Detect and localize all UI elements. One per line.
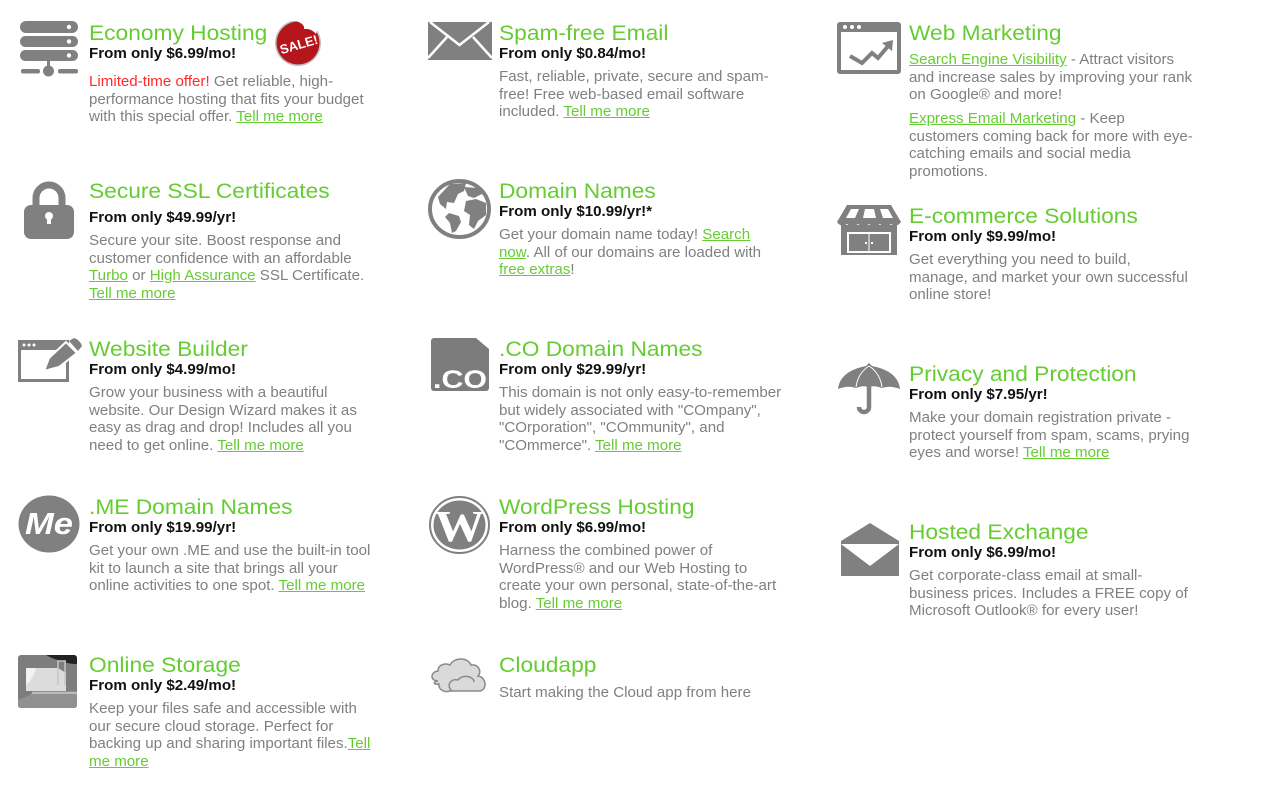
heading: Hosted Exchange [909, 520, 1089, 544]
panel: E-commerce Solutions [837, 204, 1188, 303]
description: free extras! [499, 262, 575, 278]
description: manage, and market your own successful [909, 270, 1188, 286]
description [499, 69, 769, 120]
description: our secure cloud storage. Perfect for [89, 719, 333, 735]
description [499, 543, 776, 612]
description: Get your domain name today! Search [499, 227, 750, 243]
description: Grow your business with a beautiful [89, 385, 328, 401]
description: me more [89, 754, 149, 770]
icon: padlock [24, 182, 74, 239]
description: need to get online. Tell me more [89, 438, 304, 454]
panel: Economy Hosting [20, 21, 364, 125]
icon: Me circle [18, 496, 80, 552]
price: From only $6.99/mo! [909, 545, 1056, 561]
price: From only $29.99/yr! [499, 362, 646, 378]
heading: Web Marketing [909, 21, 1062, 45]
heading: Online Storage [89, 653, 241, 677]
description: Keep your files safe and accessible with [89, 701, 357, 717]
heading: Cloudapp [499, 653, 596, 677]
sale badge [275, 21, 321, 66]
description: Get your own .ME and use the built-in tool [89, 543, 370, 559]
heading: .CO Domain Names [499, 337, 703, 361]
icon: WordPress logo [429, 496, 490, 554]
description: with this special offer. Tell me more [89, 109, 323, 125]
price: From only $9.99/mo! [909, 229, 1056, 245]
icon: window with pencil [18, 338, 82, 382]
heading: Spam-free Email [499, 21, 668, 45]
price: From only $6.99/mo! [499, 520, 646, 536]
description: search engine visibility: on Google® and more! [909, 87, 1062, 103]
icon: globe [428, 179, 491, 239]
description: search engine visibility: and increase sales by improving your rank [909, 70, 1192, 86]
heading: Economy Hosting [89, 21, 267, 45]
icon: clouds [431, 658, 486, 692]
description: online store! [909, 287, 991, 303]
description: "COrporation", "COmmunity", and [499, 420, 725, 436]
description: Tell me more [89, 286, 175, 302]
description: website. Our Design Wizard makes it as [89, 403, 357, 419]
icon: Me circle: Me [25, 506, 73, 541]
price: From only $0.84/mo! [499, 46, 646, 62]
heading: Website Builder [89, 337, 248, 361]
description: Start making the Cloud app from here [499, 685, 751, 701]
description: easy as drag and drop! Includes all you [89, 420, 352, 436]
heading: .ME Domain Names [89, 495, 293, 519]
price: From only $2.49/mo! [89, 678, 236, 694]
description: Make your domain registration private - [909, 410, 1171, 426]
icon: browser with chart [837, 22, 901, 74]
panel: Privacy and Protection [838, 362, 1189, 461]
description: included. Tell me more [499, 104, 650, 120]
description [499, 385, 781, 454]
description: eyes and worse! Tell me more [909, 445, 1109, 461]
description: express email marketing [909, 111, 1193, 180]
panel: Web Marketing [837, 21, 1193, 180]
sale badge: SALE! [278, 32, 320, 57]
description: Get everything you need to build, [909, 252, 1131, 268]
panel: Website Builder [18, 337, 357, 454]
description: express email marketing: catching emails and social media [909, 146, 1131, 162]
description: express email marketing: Express Email Marketing - Keep [909, 111, 1125, 127]
description: Turbo or High Assurance SSL Certificate. [89, 268, 364, 284]
description: Fast, reliable, private, secure and spam- [499, 69, 769, 85]
icon: umbrella [838, 363, 900, 414]
description: performance hosting that fits your budget [89, 92, 364, 108]
description: Limited-time offer! Get reliable, high- [89, 74, 333, 90]
description: Secure your site. Boost response and [89, 233, 341, 249]
description: online activities to one spot. Tell me more [89, 578, 365, 594]
description: WordPress® and our Web Hosting to [499, 561, 747, 577]
heading: Domain Names [499, 179, 656, 203]
description: Harness the combined power of [499, 543, 712, 559]
description [89, 385, 357, 454]
description: express email marketing: customers coming back for more with eye- [909, 129, 1193, 145]
price: From only $4.99/mo! [89, 362, 236, 378]
heading: Privacy and Protection [909, 362, 1137, 386]
panel: Secure SSL Certificates [24, 179, 364, 302]
panel: Spam-free Email [428, 21, 769, 120]
description: business prices. Includes a FREE copy of [909, 586, 1188, 602]
description: but widely associated with "COmpany", [499, 403, 761, 419]
description [909, 568, 1188, 621]
description: This domain is not only easy-to-remember [499, 385, 781, 401]
description [89, 74, 364, 125]
panel: WordPress Hosting [429, 495, 776, 612]
description [89, 233, 364, 302]
description: Microsoft Outlook® for every user! [909, 603, 1138, 619]
price: From only $19.99/yr! [89, 520, 236, 536]
icon: .CO file [431, 338, 489, 391]
description [89, 543, 370, 594]
description: backing up and sharing important files.Tell [89, 736, 370, 752]
price: From only $49.99/yr! [89, 210, 236, 226]
description: "COmmerce". Tell me more [499, 438, 682, 454]
panel: Cloudapp [431, 653, 751, 701]
description: kit to launch a site that brings all your [89, 561, 338, 577]
description: blog. Tell me more [499, 596, 622, 612]
description [909, 410, 1189, 461]
price: From only $10.99/yr!* [499, 204, 652, 220]
icon: storefront [837, 205, 901, 255]
description [909, 252, 1188, 303]
panel: .ME Domain Names [18, 495, 370, 594]
price: From only $6.99/mo! [89, 46, 236, 62]
description: create your own personal, state-of-the-art [499, 578, 776, 594]
description: customer confidence with an affordable [89, 251, 352, 267]
heading: Secure SSL Certificates [89, 179, 330, 203]
panel: Online Storage [18, 653, 370, 770]
price: From only $7.95/yr! [909, 387, 1048, 403]
description: free! Free web-based email software [499, 87, 744, 103]
panel: Hosted Exchange [835, 520, 1210, 625]
description: protect yourself from spam, scams, prying [909, 428, 1189, 444]
heading: E-commerce Solutions [909, 204, 1138, 228]
description: express email marketing: promotions. [909, 164, 988, 180]
icon: envelope [428, 22, 492, 60]
icon: server [20, 21, 78, 76]
description [499, 227, 761, 278]
icon: storage folder [18, 655, 77, 708]
panel: .CO Domain Names [431, 337, 781, 454]
icon: WordPress logo: W [434, 502, 484, 551]
description: search engine visibility [909, 52, 1192, 103]
icon: open envelope [841, 523, 899, 577]
description: Get corporate-class email at small- [909, 568, 1142, 584]
description: now. All of our domains are loaded with [499, 245, 761, 261]
description [89, 701, 370, 770]
panel: Domain Names [428, 179, 761, 278]
heading: WordPress Hosting [499, 495, 695, 519]
description: search engine visibility: Search Engine Visibility - Attract visitors [909, 52, 1174, 68]
